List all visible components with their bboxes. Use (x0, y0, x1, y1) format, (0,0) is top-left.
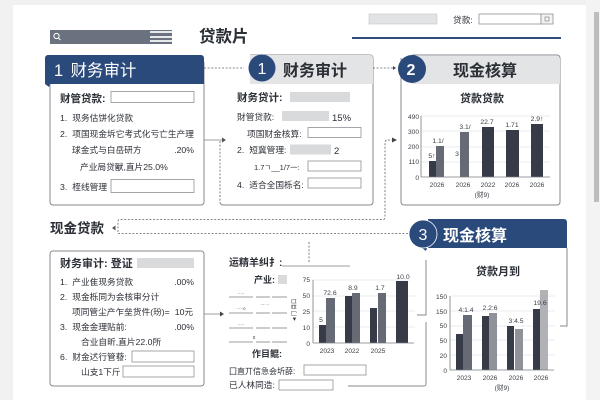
bar chart: loans monthly: 50 (440, 323, 447, 330)
bar chart: loans: 300 (408, 129, 419, 136)
bar chart: middle: 2025 (371, 348, 386, 355)
panel header: 2 (407, 62, 416, 79)
panel: financial audit 1: .20% (174, 145, 194, 155)
title: 贷款片 (199, 26, 248, 46)
panel: cash loans detail: 2. 现金栎同为会核审分计 (60, 291, 159, 302)
panel: financial audit 1: 财管贷款: (60, 92, 106, 105)
bar chart: loans monthly: 2026 (483, 375, 498, 382)
bar chart: middle: 1.7 (375, 285, 385, 292)
top right filter (369, 14, 553, 25)
panel: cash loans detail: 财务审计: 登证 (60, 256, 133, 270)
panel header: 现金核算 (443, 226, 507, 245)
panel header (248, 54, 373, 84)
bar chart: loans: 2026 (430, 182, 445, 189)
header rule (352, 37, 561, 39)
bar chart: loans monthly: 150 (436, 294, 447, 301)
panel: financial audit 1: 1. 现务估饼化贷款 (60, 112, 133, 123)
bar chart: middle: 8.9 (348, 285, 358, 292)
bar chart: loans: 2.9↑ (531, 116, 543, 123)
arrow: panel 1 to panel 2 lower (204, 138, 226, 202)
bar chart: loans monthly: 2026 (509, 375, 524, 382)
bar chart: loans: 2022 (481, 182, 496, 189)
bar chart: middle: 5 (319, 317, 323, 324)
bar chart: loans monthly: 50 (440, 338, 447, 345)
panel: financial audit 2 (220, 54, 373, 205)
bar chart: middle: 72.6 (323, 290, 337, 297)
panel header: 现金核算 (453, 61, 517, 80)
panel header (45, 55, 204, 87)
panel: cash check 3 (348, 219, 567, 392)
panel: financial audit 1 (45, 55, 204, 205)
bar chart: loans: 490 (408, 114, 419, 121)
panel: cash loans detail: 3. 现金金理贴前: (60, 321, 127, 332)
form block: ····· (238, 322, 244, 327)
bar chart: loans: 1.71 (505, 122, 519, 129)
arrow: to panel 3 lower (385, 138, 397, 210)
form block: ···· ·· (260, 302, 270, 307)
bar chart: loans monthly: 贷款月到 (476, 264, 520, 278)
bar chart: loans: 2026 (505, 182, 520, 189)
bar chart: loans: 3 (455, 151, 459, 158)
bar chart: middle: 10.0 (396, 274, 410, 281)
panel: financial audit 1: 2. 项国现金坼它考式化亏亡生产理 (60, 128, 194, 139)
panel header (398, 55, 560, 84)
bar chart: loans monthly: 0 (443, 368, 447, 375)
form block: 产业: (254, 274, 275, 285)
bar chart: middle: 0 (306, 341, 310, 348)
panel: cash loans detail: 项同管尘产乍垒货件(玢)= 10元 (72, 306, 193, 317)
panel: financial audit 2: 2. 短冀管理: (237, 144, 286, 155)
bar chart: loans monthly (436, 264, 555, 392)
form block: ····· (238, 291, 244, 296)
bar chart: middle: 25 (303, 309, 310, 316)
bar chart: loans: 贷款贷款 (460, 91, 504, 105)
panel: cash check 2 (398, 55, 560, 205)
form block: 作目鲲: (252, 348, 282, 359)
bar chart: middle: 2023 (320, 348, 335, 355)
bar chart: loans monthly: 2026 (534, 375, 549, 382)
arrow: panel 2 to panel 3 top (373, 66, 396, 70)
panel header (409, 219, 567, 251)
panel: cash loans detail: .00% (174, 322, 194, 332)
panel header: 财务审计 (283, 61, 347, 80)
bar chart: loans: 1.1/ (432, 138, 444, 145)
panel header: 3 (419, 227, 428, 244)
form block: 0 (253, 335, 256, 340)
bar chart: loans: 0 (415, 175, 419, 182)
bar chart: loans: 110 (408, 159, 419, 166)
bar chart: loans (408, 91, 550, 199)
panel: cash loans detail: 1. 产业隹现务贷款 (60, 276, 133, 287)
panel header: 1 财务审计 (54, 62, 136, 80)
form block: ·····0 (237, 306, 246, 311)
panel: cash loans detail: .00% (174, 277, 194, 287)
panel header: 1 (258, 61, 267, 78)
bar chart: loans: 22.7 (480, 119, 494, 126)
panel: financial audit 2: 项国财金核算: (247, 128, 302, 139)
top right filter: 贷款: (453, 14, 473, 25)
bar chart: loans monthly: 4:1.4 (458, 307, 474, 314)
panel: cash loans detail: 合业自昕,直片22.0所 (81, 336, 161, 347)
panel: financial audit 2: 15% (332, 113, 352, 124)
panel: cash loans detail: 6. 财金迖行管蕟: (60, 351, 127, 362)
dashed connector above form (308, 242, 310, 262)
bar chart: loans: 200 (408, 144, 419, 151)
form block (229, 256, 366, 390)
bar chart: loans: 2026 (530, 182, 545, 189)
panel: financial audit 1: 球金式与白岳研方 (72, 144, 142, 155)
panel: financial audit 1: 产业局贷獸,直片25.0% (80, 161, 168, 172)
panel: financial audit 1: 3. 桎线管理 (60, 181, 107, 192)
bar chart: loans: 3.1/ (459, 124, 471, 131)
bar chart: loans: (财9) (475, 190, 489, 199)
bar chart: loans monthly: 20 (440, 353, 447, 360)
arrow: cash panel to form (204, 312, 224, 316)
bar chart: loans monthly: 19.6 (533, 300, 547, 307)
bar chart: middle: 75 (303, 277, 310, 284)
bar chart: loans monthly: 2.2:6 (482, 305, 498, 312)
bar chart: middle (290, 274, 415, 355)
panel: financial audit 2: 財管贷款: (237, 111, 274, 122)
panel: financial audit 2: 4. 适合全国栎名: (237, 179, 304, 190)
form block: 囗直丌信急会圻薛: (229, 366, 295, 376)
panel: cash loans detail (50, 251, 204, 386)
panel: financial audit 2: 财务贷计: (237, 91, 282, 104)
section heading: 现金贷款 (50, 220, 104, 236)
panel: financial audit 2: 2 (334, 146, 339, 157)
form block: 运精羊纠扌: (229, 256, 282, 269)
search bar with icon (50, 30, 172, 44)
dashed connector to section heading (112, 210, 410, 234)
bar chart: loans monthly: 150 (436, 309, 447, 316)
bar chart: middle: 50 (303, 293, 310, 300)
arrow: panel 1 to panel 2 top (204, 67, 244, 69)
bar chart: middle: ◄门 目口 (290, 299, 298, 322)
bar chart: loans monthly: 3:4.5 (508, 318, 524, 325)
form block: 已人林同造: (229, 379, 275, 390)
panel: cash loans detail: 山支1下斤 (81, 366, 121, 377)
bar chart: loans monthly: (财9) (495, 383, 509, 392)
bar chart: middle: 2022 (345, 348, 360, 355)
panel: financial audit 2: 1.7ㄱ__1/7一: (254, 163, 300, 172)
bar chart: middle: 10 (303, 325, 310, 332)
bar chart: loans: 5↑ (428, 153, 436, 160)
bar chart: loans: 2026 (456, 182, 471, 189)
bar chart: loans monthly: 2023 (457, 375, 472, 382)
